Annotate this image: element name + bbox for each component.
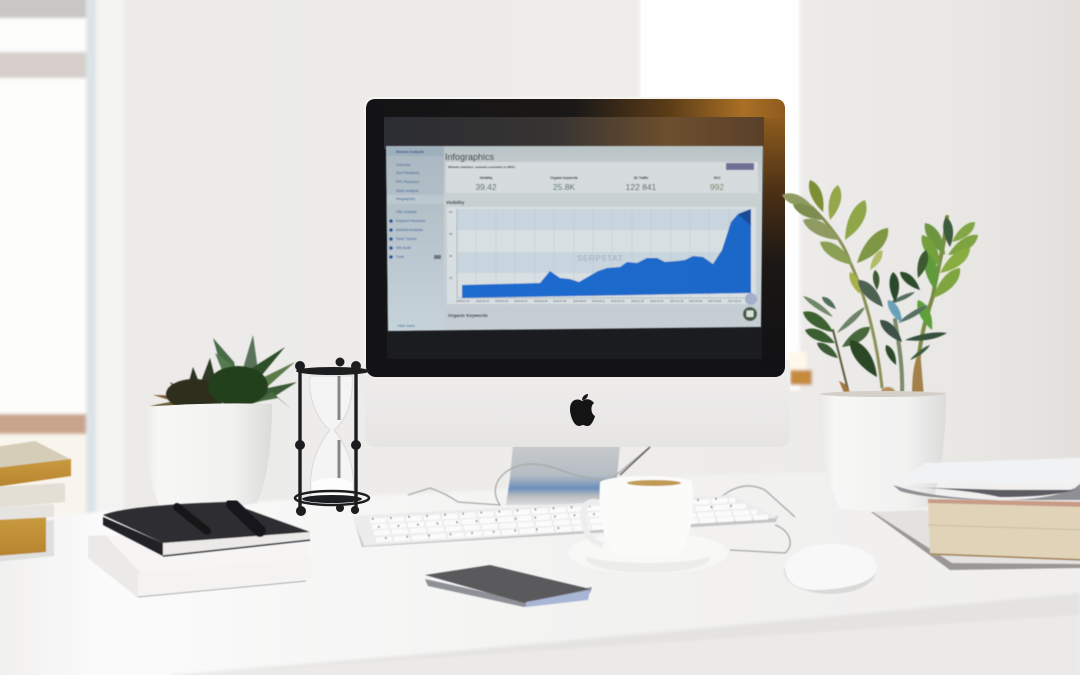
- section heading: organic keywords: Organic Keywords: [448, 313, 488, 318]
- visibility area chart: 2016-10-16: [611, 299, 625, 303]
- plant pot with zz plant: [780, 178, 981, 512]
- visibility area chart: 2016-07-03: [553, 299, 567, 303]
- visibility area chart: 2016-08-07: [573, 299, 587, 303]
- sidebar: Domain Analysis: [396, 150, 424, 154]
- visibility area chart: 2017-04-09: [708, 299, 722, 303]
- hourglass: [295, 358, 370, 516]
- visibility area chart: 2016-04-24: [514, 299, 528, 303]
- section heading: visibility: Visibility: [446, 200, 465, 205]
- sidebar: Tools: [396, 255, 404, 259]
- lower left leaves: [800, 294, 883, 381]
- visibility area chart: 2017-01-29: [670, 299, 684, 303]
- upper left leaves: [780, 178, 894, 295]
- desk: [0, 458, 1080, 675]
- statistics panel: Website statistics: serpstat.com/ranks in (9KK): [448, 165, 515, 169]
- statistics panel: 25.8K: [553, 182, 575, 192]
- statistics panel: 122 841: [626, 182, 657, 192]
- sidebar: Rank Tracker: [396, 237, 418, 241]
- visibility area chart: 2016-03-20: [495, 299, 509, 303]
- sidebar: PPC Research: [396, 180, 419, 184]
- statistics panel: SE Traffic: [634, 176, 649, 180]
- coffee cup and saucer: [568, 476, 728, 574]
- plant pot with succulent: [143, 335, 297, 509]
- visibility area chart: 2016-05-29: [534, 299, 548, 303]
- saucer: [568, 532, 728, 574]
- statistics panel: 39.42: [475, 182, 497, 192]
- left window: [0, 0, 124, 520]
- sidebar: Overview: [396, 163, 411, 167]
- chat button: [743, 307, 757, 321]
- visibility area chart: 2016-01-10: [456, 299, 470, 303]
- smartphone: [425, 565, 592, 607]
- page title: Infographics: [445, 152, 495, 162]
- visibility area chart: 2016-09-11: [592, 299, 606, 303]
- sidebar: Hide menu: [398, 324, 415, 328]
- white pot: [143, 403, 272, 509]
- succulent: [150, 335, 297, 410]
- statistics panel: Organic keywords: [550, 176, 578, 180]
- sidebar: Site Audit: [396, 246, 411, 250]
- white pot: [819, 391, 946, 512]
- visibility area chart: 15: [449, 276, 453, 280]
- bright centre window: [640, 0, 800, 390]
- sidebar: [386, 146, 444, 331]
- serpstat watermark: SERPSTAT: [577, 254, 623, 263]
- monitor chin: [365, 360, 790, 447]
- statistics panel: [446, 162, 758, 193]
- black notebook: [103, 502, 310, 556]
- open book on top: [893, 480, 1080, 500]
- dim upper screen: [384, 117, 764, 149]
- monitor stand: [506, 445, 620, 505]
- book stack, right: [871, 458, 1080, 570]
- statistics panel: 992: [710, 182, 724, 192]
- handle: [583, 502, 603, 545]
- upper right leaves: [914, 216, 981, 332]
- visibility area chart: 2016-02-14: [476, 299, 490, 303]
- statistics panel: SEO: [714, 176, 721, 180]
- mouse: [784, 544, 877, 594]
- visibility area chart: 2017-03-05: [689, 299, 703, 303]
- keyboard: [352, 495, 778, 547]
- visibility area chart: 45: [449, 232, 453, 236]
- sidebar: SEO Research: [396, 171, 419, 175]
- visibility area chart: 2016-12-25: [650, 299, 664, 303]
- right wall: [800, 0, 1080, 485]
- visibility area chart: [447, 207, 757, 305]
- visibility area chart: 30: [449, 254, 453, 258]
- visibility area chart: 2016-11-20: [631, 299, 645, 303]
- visibility area chart: 2017-05-14: [728, 299, 742, 303]
- sidebar: Batch Analysis: [396, 189, 419, 193]
- zz plant: [780, 178, 981, 397]
- dark middle leaves: [854, 249, 948, 366]
- glass: [310, 376, 354, 497]
- keys: [370, 500, 768, 540]
- book stack, left: [0, 441, 72, 562]
- white book: [88, 535, 312, 598]
- cup body: [600, 476, 693, 556]
- thick book: [928, 500, 1080, 561]
- sidebar: Infographics: [396, 197, 415, 201]
- screen: dashboard: [386, 146, 763, 331]
- sidebar: Keyword Research: [396, 219, 426, 223]
- statistics panel: Visibility: [479, 176, 493, 180]
- pens: [177, 507, 207, 531]
- visibility area chart: 60: [449, 210, 453, 214]
- cable: [408, 447, 795, 553]
- sidebar: Backlink Analysis: [396, 228, 423, 232]
- magazine: [871, 512, 1080, 570]
- sidebar: URL Analysis: [396, 210, 417, 214]
- apple logo: [570, 394, 595, 426]
- computer monitor: [364, 97, 790, 447]
- black bezel: [366, 99, 785, 377]
